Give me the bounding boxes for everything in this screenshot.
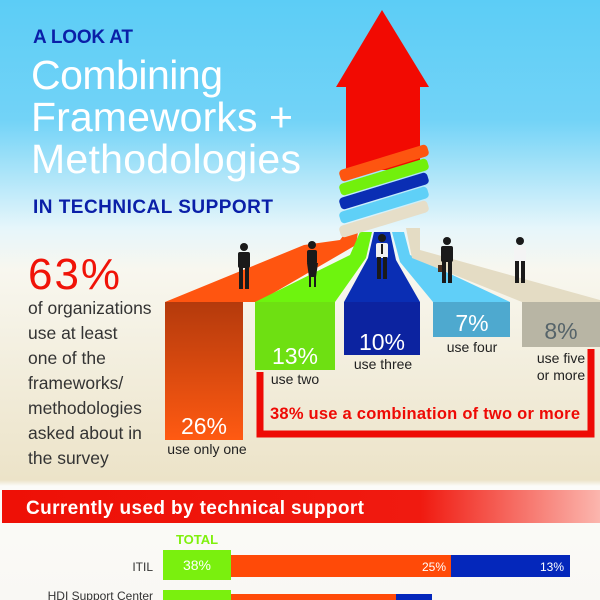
column: use five or more: use five <box>537 350 585 366</box>
bar chart: 25% <box>422 560 446 574</box>
arrow <box>336 10 429 170</box>
bar chart: ITIL <box>132 560 153 574</box>
streams fanning out <box>165 228 600 302</box>
column: use four <box>433 302 510 355</box>
bar chart: TOTAL <box>176 532 218 547</box>
column: use three: use three <box>354 356 412 372</box>
bar chart: 13% <box>540 560 564 574</box>
column: use only one <box>165 302 247 457</box>
red combination frame <box>260 349 591 434</box>
title: Combining <box>31 52 223 98</box>
column: use three: 10% <box>359 329 405 355</box>
column: use five or more <box>522 302 600 383</box>
column: use five or more: 8% <box>544 318 578 344</box>
ribbon bands <box>338 144 430 238</box>
left stat text: asked about in <box>28 423 142 443</box>
left stat text: one of the <box>28 348 106 368</box>
column: use only one: 26% <box>181 413 227 439</box>
section header <box>2 490 600 523</box>
red combination frame: 38% use a combination of two or more <box>270 405 580 423</box>
left stat text: 63% <box>28 250 120 299</box>
column: use four: use four <box>447 339 498 355</box>
bar chart: 38% <box>183 557 211 573</box>
section header: Currently used by technical support <box>26 498 365 519</box>
title <box>31 27 301 218</box>
left stat text: methodologies <box>28 398 142 418</box>
title: Methodologies <box>31 136 301 182</box>
left stat text: frameworks/ <box>28 373 123 393</box>
title: Frameworks + <box>31 94 293 140</box>
column: use three <box>344 302 420 372</box>
bar chart <box>48 532 570 600</box>
column: use two: use two <box>271 371 319 387</box>
column: use two <box>255 302 335 387</box>
title: IN TECHNICAL SUPPORT <box>33 197 273 218</box>
column: use two: 13% <box>272 343 318 369</box>
column: use five or more: or more <box>537 367 585 383</box>
left stat text <box>28 250 156 468</box>
left stat text: the survey <box>28 448 109 468</box>
left stat text: use at least <box>28 323 118 343</box>
left stat text: of organizations <box>28 298 152 318</box>
title: A LOOK AT <box>33 27 133 48</box>
column: use only one: use only one <box>167 441 247 457</box>
column: use four: 7% <box>455 310 489 336</box>
people icons <box>238 234 526 289</box>
